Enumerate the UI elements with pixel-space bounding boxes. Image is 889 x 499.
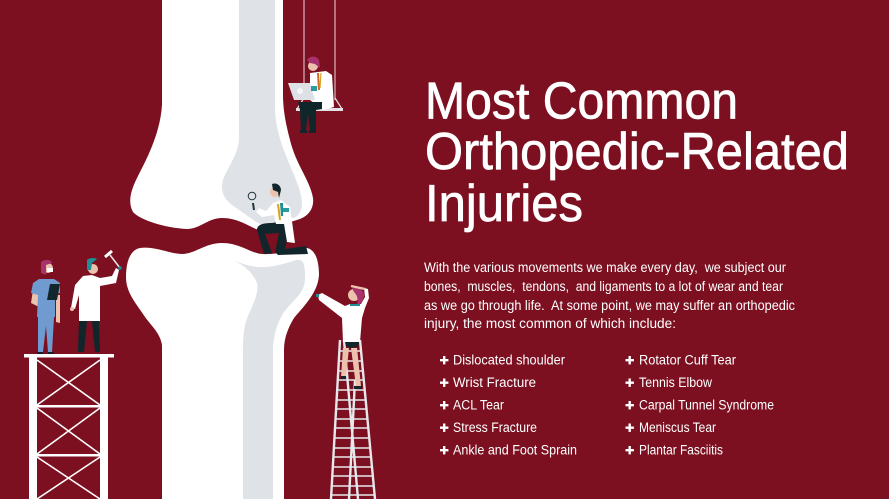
person: woman on ladder xyxy=(316,286,369,389)
injury list: right column: Plantar Fasciitis xyxy=(639,442,723,458)
upper bone xyxy=(130,0,313,231)
title: Orthopedic-Related xyxy=(425,123,849,181)
scaffold xyxy=(24,354,114,499)
intro paragraph xyxy=(424,260,795,331)
injury list: left column xyxy=(440,352,577,458)
injury list: right column: Rotator Cuff Tear xyxy=(639,352,736,368)
intro paragraph: as we go through life. At some point, we may suffer an orthopedic xyxy=(424,298,795,313)
injury list: left column: Stress Fracture xyxy=(453,420,537,435)
title: Most Common xyxy=(425,72,738,130)
injury list: right column xyxy=(626,352,774,458)
injury list: left column: ACL Tear xyxy=(453,398,504,412)
injury list: right column: Carpal Tunnel Syndrome xyxy=(639,398,774,412)
injury list: left column: Ankle and Foot Sprain xyxy=(453,442,577,458)
intro paragraph: With the various movements we make every day, we subject our xyxy=(424,260,786,275)
injury list: left column: Wrist Fracture xyxy=(453,375,536,390)
injury list: left column: Dislocated shoulder xyxy=(453,352,565,368)
person: doctor on swing with laptop xyxy=(288,0,343,133)
person: nurse with clipboard xyxy=(31,260,60,354)
lower bone xyxy=(126,243,319,499)
title xyxy=(425,72,849,233)
person: doctor with hammer xyxy=(70,251,122,352)
intro paragraph: bones, muscles, tendons, and ligaments to a lot of wear and tear xyxy=(424,279,783,294)
title: Injuries xyxy=(425,175,583,233)
injury list: right column: Tennis Elbow xyxy=(639,375,712,390)
injury list: right column: Meniscus Tear xyxy=(639,420,716,435)
person: kneeling doctor with magnifier xyxy=(248,183,308,255)
intro paragraph: injury, the most common of which include: xyxy=(424,316,676,331)
ladder xyxy=(331,340,375,499)
